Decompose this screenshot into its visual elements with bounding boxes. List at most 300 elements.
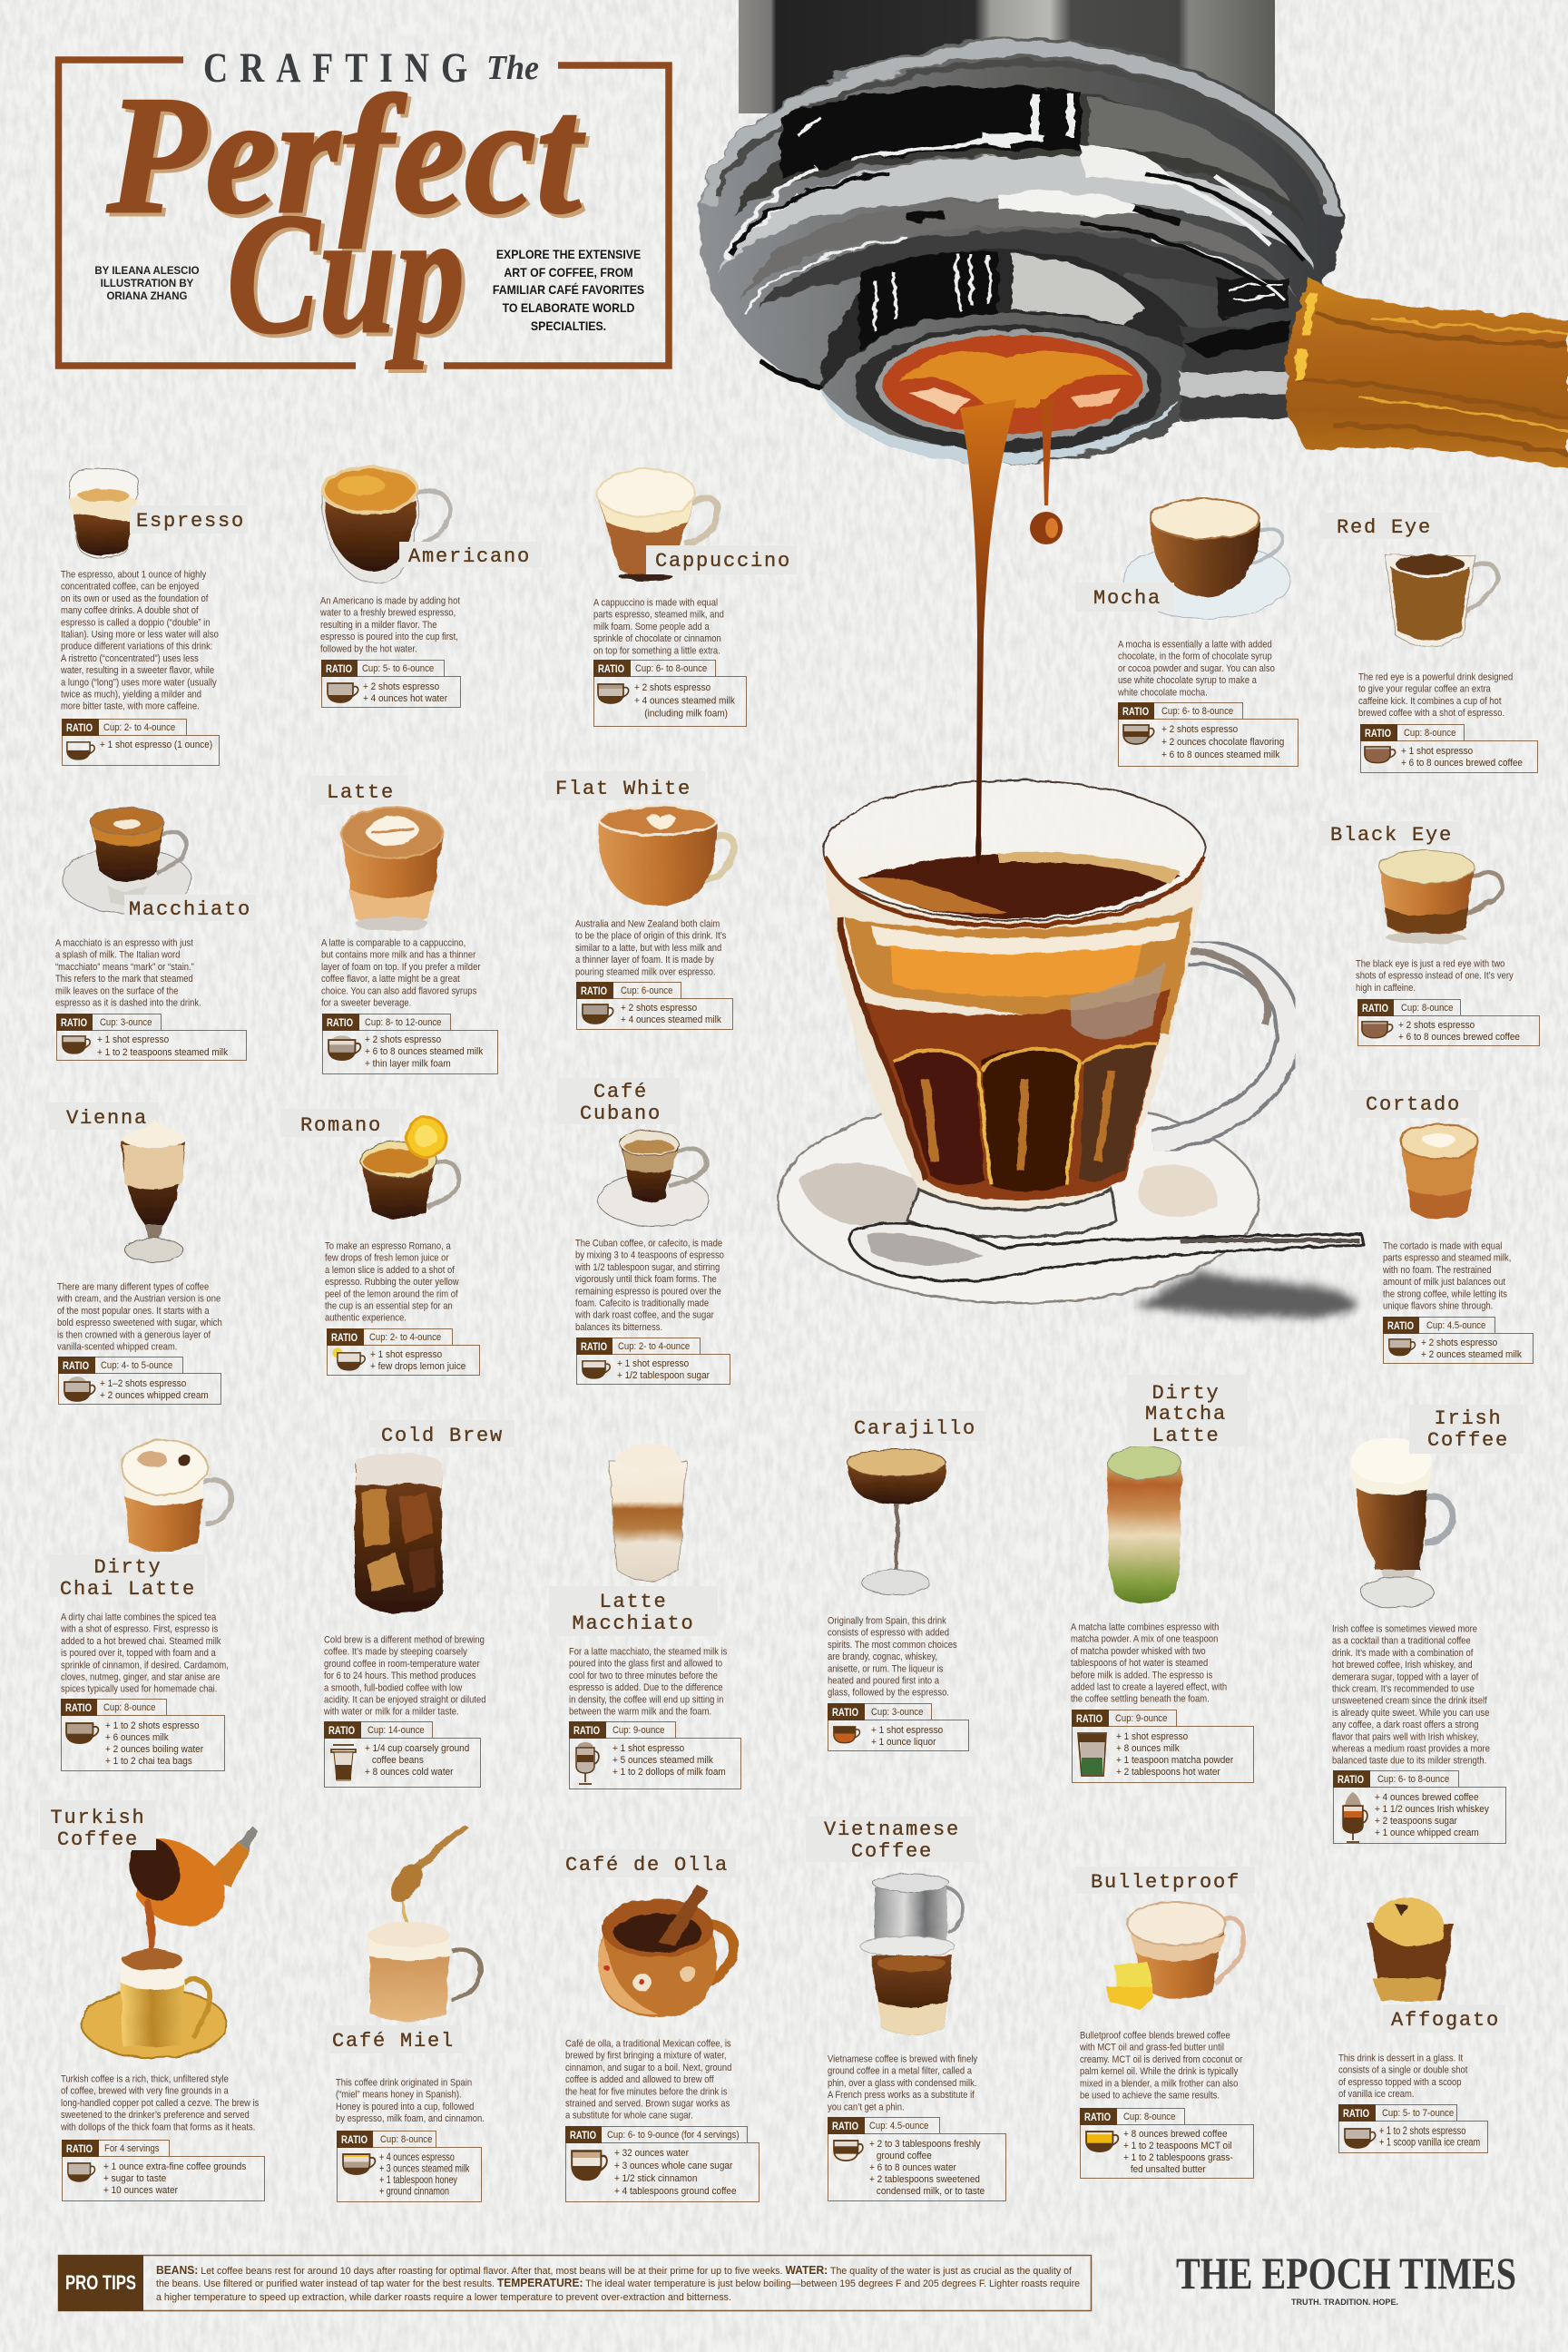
description: espresso. Rubbing the outer yellow	[325, 1278, 459, 1288]
ratio box: + 5 ounces steamed milk	[612, 1754, 713, 1766]
ratio box: + 1/4 cup coarsely ground	[365, 1742, 469, 1754]
ratio box: + 2 tablespoons hot water	[1116, 1766, 1220, 1778]
logo: the epoch times: TRUTH. TRADITION. HOPE.	[1291, 2298, 1398, 2307]
ratio box: RATIO	[581, 985, 607, 997]
illustration: matcha glass	[1107, 1446, 1181, 1604]
ratio box	[62, 719, 220, 766]
description: anisette, or rum. The liqueur is	[828, 1664, 943, 1675]
description: by mixing 3 to 4 teaspoons of espresso	[575, 1250, 724, 1261]
description: Vietnamese coffee is brewed with finely	[828, 2054, 978, 2065]
ratio box: + 6 ounces milk	[105, 1731, 169, 1743]
ratio box: Cup: 4.5-ounce	[1426, 1320, 1486, 1331]
description: with 1/2 tablespoon sugar, and stirring	[574, 1262, 720, 1273]
panel: cafe de olla	[559, 1849, 759, 2201]
description: foam. Cafecito is traditionally made	[575, 1298, 709, 1309]
description: amount of milk just balances out	[1383, 1278, 1505, 1288]
tips text: the beans. Use filtered or purified water instead of tap water for the best results. TEMPERATURE: The ideal water temperature is just below boiling—between 195 degrees F and 205 degrees F. Lighter roasts require	[156, 2277, 1080, 2289]
description: as a cocktail than a traditional coffee	[1332, 1636, 1471, 1647]
description: Turkish coffee is a rich, thick, unfiltered style	[61, 2074, 229, 2085]
description: be used to achieve the same results.	[1080, 2091, 1220, 2102]
description: tablespoons of hot water is steamed	[1071, 1659, 1209, 1669]
title label	[545, 771, 705, 800]
crema and basket	[883, 336, 1142, 434]
ratio box: + sugar to taste	[103, 2172, 166, 2184]
ratio box: + 2 shots espresso	[621, 1002, 697, 1014]
ratio box: RATIO	[1365, 727, 1391, 740]
ratio box: + 8 ounces milk	[1116, 1742, 1180, 1754]
ratio box: + 6 to 8 ounces steamed milk	[365, 1046, 484, 1057]
description: white chocolate mocha.	[1117, 688, 1208, 699]
title block: The	[486, 49, 539, 87]
title label: Macchiato	[572, 1612, 695, 1635]
ratio box: RATIO	[573, 1724, 600, 1737]
description: peel of the lemon around the rim of	[325, 1289, 458, 1300]
ratio box	[1333, 1770, 1506, 1844]
ratio box: + 1 shot espresso	[1116, 1730, 1188, 1742]
ratio box: + 3 ounces whole cane sugar	[614, 2160, 733, 2171]
icon: matcha glass	[1078, 1733, 1106, 1776]
description: A French press works as a substitute if	[828, 2091, 975, 2101]
ratio box: RATIO	[327, 1016, 353, 1029]
ratio box	[56, 1014, 247, 1060]
ratio box: + 1 to 2 chai tea bags	[105, 1755, 192, 1767]
description: This refers to the mark that steamed	[55, 975, 193, 985]
description: more bitter taste, with more caffeine.	[61, 701, 200, 712]
ratio box: + 3 ounces steamed milk	[379, 2164, 470, 2175]
illustration: black eye cup	[1379, 850, 1502, 944]
ratio box: RATIO	[326, 662, 352, 675]
ratio box: RATIO	[331, 1331, 358, 1344]
description: for 6 to 24 hours. This method produces	[324, 1671, 475, 1681]
ratio box: Cup: 3-ounce	[871, 1707, 924, 1718]
description: but contains more milk and has a thinner	[321, 950, 476, 961]
ratio box: + 2 shots espresso	[1398, 1019, 1475, 1031]
description: poured into the glass first and allowed to	[569, 1659, 722, 1670]
description: with dark roast coffee, and the sugar	[574, 1310, 714, 1321]
description: The espresso, about 1 ounce of highly	[61, 570, 207, 581]
panel: romano	[280, 1109, 479, 1376]
description: authentic experience.	[325, 1313, 407, 1324]
title label	[1127, 1375, 1248, 1447]
description: balances its bitterness.	[575, 1322, 662, 1333]
title label: Café	[593, 1081, 648, 1103]
title label	[557, 1078, 680, 1125]
ratio box: RATIO	[65, 1701, 92, 1714]
ratio box: + 1 to 2 dollops of milk foam	[612, 1766, 726, 1778]
description: the strong coffee, while letting its	[1383, 1289, 1507, 1300]
description: a smooth, full-bodied coffee with low	[324, 1683, 463, 1694]
illustration: romano glass with lemon	[360, 1117, 458, 1220]
title label: Dirty	[93, 1556, 162, 1579]
ratio box: + 2 ounces whipped cream	[100, 1389, 209, 1401]
description: a splash of milk. The Italian word	[55, 950, 181, 961]
panel: flat white	[545, 771, 733, 1029]
ratio box: + 1 shot espresso (1 ounce)	[100, 739, 212, 750]
ratio box: + 6 to 8 ounces water	[869, 2161, 956, 2173]
description: high in caffeine.	[1356, 983, 1416, 994]
description: A cappuccino is made with equal	[593, 598, 718, 609]
cup body and coffee	[824, 780, 1205, 1238]
panel: red eye	[1321, 513, 1537, 773]
byline: ORIANA ZHANG	[106, 291, 188, 302]
description: A macchiato is an espresso with just	[55, 938, 193, 949]
illustration: large glass coffee cup on saucer with spoon	[778, 780, 1364, 1318]
title label	[40, 1800, 156, 1851]
ratio box: ground coffee	[877, 2150, 932, 2161]
ratio box: + 1/2 stick cinnamon	[614, 2172, 697, 2184]
description: of matcha powder whisked with two	[1071, 1646, 1206, 1657]
ratio box: RATIO	[1076, 1712, 1102, 1725]
description: milk foam. Some people add a	[593, 622, 710, 632]
title label: Irish	[1434, 1407, 1503, 1430]
description: A mocha is essentially a latte with added	[1118, 640, 1272, 651]
description: The Cuban coffee, or cafecito, is made	[575, 1239, 722, 1250]
illustration: macchiato on saucer	[63, 808, 191, 913]
title label: Turkish	[50, 1807, 146, 1829]
panel: pro tips	[58, 2255, 1091, 2311]
ratio box: + 2 tablespoons sweetened	[869, 2173, 980, 2185]
description: added last to create a layered effect, with	[1071, 1682, 1227, 1693]
description: espresso as it is dashed into the drink.	[55, 998, 201, 1009]
description: An Americano is made by adding hot	[320, 596, 460, 607]
ratio box: + 2 shots espresso	[363, 681, 439, 692]
description: coffee. It’s made by steeping coarsely	[324, 1647, 468, 1658]
title label	[850, 1411, 985, 1441]
panel: cappuccino	[593, 469, 797, 726]
ratio box: + 4 ounces brewed coffee	[1375, 1791, 1479, 1803]
description: sprinkle of cinnamon, if desired. Cardamom,	[61, 1661, 229, 1671]
description: the coffee settling beneath the foam.	[1071, 1694, 1210, 1705]
description: cinnamon, and sugar to a boil. Next, ground	[565, 2063, 732, 2073]
ratio box: RATIO	[66, 721, 93, 734]
description: sprinkle of chocolate or cinnamon	[593, 634, 721, 644]
ratio box	[61, 1699, 225, 1771]
ratio box	[576, 982, 733, 1029]
ratio box: + 2 teaspoons sugar	[1375, 1815, 1457, 1827]
ratio box: RATIO	[1122, 705, 1149, 718]
ratio box: + 2 ounces steamed milk	[1421, 1348, 1522, 1360]
title label	[1350, 1090, 1478, 1118]
group head	[739, 0, 1275, 113]
illustration: irish coffee glass	[1350, 1438, 1453, 1608]
description: A matcha latte combines espresso with	[1071, 1622, 1220, 1633]
ratio box: RATIO	[1338, 1773, 1364, 1786]
tips text	[156, 2264, 1080, 2303]
ratio box: + thin layer milk foam	[365, 1058, 451, 1070]
description: with MCT oil and grass-fed butter until	[1079, 2043, 1224, 2053]
description: twice as much), yielding a milder and	[61, 690, 201, 701]
ratio box: Cup: 6- to 8-ounce	[1161, 706, 1233, 717]
description: or cocoa powder and sugar. You can also	[1118, 663, 1275, 674]
intro text: ART OF COFFEE, FROM	[504, 265, 633, 279]
title label	[49, 1554, 205, 1601]
ratio box	[565, 2126, 759, 2201]
description: to give your regular coffee an extra	[1358, 684, 1491, 695]
ratio box: Cup: 8-ounce	[103, 1702, 156, 1713]
ratio box: + 4 ounces hot water	[363, 692, 447, 704]
title label: Affogato	[1391, 2009, 1500, 2032]
saucer	[778, 1096, 1357, 1318]
ratio box: Cup: 8-ounce	[1123, 2112, 1176, 2122]
frame	[58, 60, 669, 366]
ratio box: Cup: 8- to 12-ounce	[365, 1017, 442, 1028]
ratio box: fed unsalted butter	[1131, 2163, 1206, 2175]
description: thick cream. It’s recommended to use	[1332, 1684, 1475, 1695]
description: resulting in a milder flavor. The	[320, 620, 437, 631]
panel: vienna	[49, 1102, 222, 1405]
ratio box: + 1 teaspoon matcha powder	[1116, 1754, 1234, 1766]
ratio box: + 2 shots espresso	[365, 1034, 441, 1045]
illustration: clay mug with cinnamon	[598, 1885, 733, 2017]
description: matcha powder. A mix of one teaspoon	[1071, 1634, 1219, 1645]
ratio box: + 4 ounces steamed milk	[621, 1014, 721, 1025]
title label: Mocha	[1093, 587, 1161, 610]
ratio box: + 1 shot espresso	[871, 1724, 943, 1736]
ratio box: Cup: 8-ounce	[1404, 728, 1456, 739]
ratio box: Cup: 4- to 5-ounce	[101, 1360, 172, 1371]
description: added to a hot brewed chai. Steamed milk	[61, 1636, 221, 1647]
ratio box	[593, 660, 746, 726]
panel: cafe miel	[330, 1824, 485, 2201]
description: Honey is poured into a cup, followed	[336, 2102, 475, 2112]
title label	[1076, 1867, 1255, 1894]
illustration: red eye glass cup	[1386, 554, 1497, 646]
ratio box: Cup: 5- to 6-ounce	[362, 663, 434, 674]
panel: bulletproof	[1076, 1867, 1255, 2178]
ratio box: Cup: 6- to 8-ounce	[1377, 1774, 1449, 1785]
title label: Cold Brew	[381, 1425, 504, 1447]
title label: Bulletproof	[1091, 1871, 1240, 1894]
panel: turkish coffee	[40, 1800, 265, 2201]
illustration: affogato glass with ice cream	[1367, 1898, 1454, 2001]
description: For a latte macchiato, the steamed milk is	[569, 1647, 727, 1658]
description: of espresso topped with a scoop	[1338, 2077, 1462, 2088]
panel: macchiato	[55, 808, 256, 1060]
illustration: honey dipper over mug	[368, 1824, 481, 2022]
title label: Café Miel	[332, 2030, 455, 2053]
ratio box: Cup: 3-ounce	[100, 1017, 152, 1028]
description: long-handled copper pot called a cezve. The brew is	[61, 2098, 259, 2109]
description: to be the place of origin of this drink. It’s	[575, 931, 726, 942]
description: balanced taste due to its milder strength.	[1332, 1756, 1486, 1767]
title label: Matcha	[1145, 1403, 1227, 1426]
cup handle	[1152, 951, 1289, 1142]
title label	[49, 1102, 159, 1130]
description: cloves, nutmeg, ginger, and star anise are	[61, 1672, 220, 1683]
pro tips badge	[58, 2255, 143, 2311]
description: espresso is added. Due to the difference	[569, 1683, 723, 1693]
ratio box: + 1 1/2 ounces Irish whiskey	[1375, 1803, 1489, 1815]
ratio box: RATIO	[832, 2120, 858, 2132]
ratio box: Cup: 4.5-ounce	[869, 2121, 929, 2132]
description: creamy. MCT oil is derived from coconut or	[1080, 2054, 1243, 2065]
description: “macchiato” means “mark” or “stain.”	[55, 962, 194, 973]
ratio box: Cup: 8-ounce	[380, 2134, 433, 2145]
panel: dirty matcha latte	[1071, 1375, 1254, 1782]
ratio box: + 1 to 2 teaspoons steamed milk	[97, 1046, 229, 1058]
ratio box: Cup: 2- to 4-ounce	[103, 722, 175, 733]
illustration: latte macchiato glass	[609, 1444, 687, 1581]
metal streaks	[726, 93, 1284, 331]
heading: perfect cup	[106, 62, 585, 369]
description: a lemon slice is added to a shot of	[325, 1265, 455, 1276]
tips text: BEANS: Let coffee beans rest for around 10 days after roasting for optimal flavor. After that, most beans will be at their prime for up to five weeks. WATER: The quality of the water is just as crucial as the quality of	[156, 2264, 1073, 2277]
panel: black eye	[1318, 821, 1539, 1045]
description: similar to a latte, but with less milk and	[575, 943, 722, 954]
description: with a shot of espresso. First, espresso is	[60, 1624, 218, 1635]
description: of vanilla ice cream.	[1338, 2090, 1415, 2100]
ratio box: Cup: 6- to 8-ounce	[635, 663, 707, 674]
description: is poured over it, topped with foam and a	[61, 1649, 216, 1659]
description: phin, over a glass with condensed milk.	[828, 2078, 976, 2089]
ratio box: Cup: 6-ounce	[621, 985, 673, 996]
ratio box: + 2 shots espresso	[1161, 723, 1238, 735]
description: Bulletproof coffee blends brewed coffee	[1080, 2031, 1230, 2042]
ratio box: RATIO	[328, 1724, 355, 1737]
ratio box: RATIO	[61, 1016, 87, 1029]
description: Irish coffee is sometimes viewed more	[1332, 1624, 1477, 1635]
description: on its own or used as the foundation of	[61, 593, 209, 604]
description: To make an espresso Romano, a	[325, 1241, 451, 1252]
panel: vietnamese coffee	[806, 1817, 1005, 2201]
ratio box: coffee beans	[372, 1754, 424, 1766]
illustration: espresso machine portafilter	[698, 0, 1568, 468]
title label: Coffee	[851, 1840, 933, 1863]
ratio box: (including milk foam)	[644, 708, 728, 720]
title label	[1075, 583, 1174, 612]
description: (“miel” means honey in Spanish).	[336, 2090, 462, 2101]
ratio box	[1072, 1710, 1254, 1782]
ratio box	[58, 1357, 221, 1405]
description: A dirty chai latte combines the spiced tea	[61, 1612, 217, 1623]
intro text: TO ELABORATE WORLD	[503, 300, 634, 315]
tips text: a higher temperature to speed up extraction, while darker roasts require a lower temperature to prevent over-extraction and bitterness.	[156, 2292, 731, 2303]
description: hot brewed coffee, Irish whiskey, and	[1332, 1661, 1473, 1671]
panel: latte macchiato	[549, 1444, 740, 1789]
illustration: cezve pouring into gold cup	[82, 1826, 258, 2058]
ratio box: + 1/2 tablespoon sugar	[617, 1369, 710, 1381]
description: Café de olla, a traditional Mexican coffee, is	[565, 2039, 731, 2050]
ratio box: RATIO	[1362, 1002, 1388, 1014]
illustration: chai mug	[122, 1440, 231, 1553]
description: The black eye is just a red eye with two	[1356, 959, 1505, 970]
description: A latte is comparable to a cappuccino,	[321, 938, 466, 949]
ratio box: RATIO	[598, 662, 624, 675]
description: brewed by first bringing a mixture of water,	[565, 2051, 727, 2062]
description: glass, followed by the espresso.	[828, 1688, 949, 1699]
ratio box	[322, 1014, 497, 1074]
description: of coffee, brewed with very fine grounds in a	[61, 2086, 229, 2097]
illustration: cappuccino cup	[597, 469, 719, 581]
description: by espresso, milk foam, and cinnamon.	[336, 2114, 485, 2124]
illustration: cubano cup on saucer	[598, 1131, 709, 1226]
description: few drops of fresh lemon juice or	[325, 1253, 449, 1264]
illustration: double wall glass	[322, 467, 450, 583]
description: vanilla-scented whipped cream.	[57, 1342, 177, 1353]
description: a lungo (“long”) uses more water (usually	[61, 678, 218, 689]
illustration: vienna glass with whipped cream	[122, 1121, 185, 1262]
ratio box: RATIO	[63, 1359, 89, 1372]
illustration: cortado glass	[1400, 1124, 1479, 1220]
title label: Red Eye	[1337, 516, 1432, 539]
intro text	[493, 247, 644, 333]
ratio box	[828, 2117, 1005, 2201]
title label: Espresso	[136, 510, 245, 533]
description: spirits. The most common choices	[828, 1640, 957, 1651]
panel: irish coffee	[1331, 1405, 1524, 1844]
description: demerara sugar, topped with a layer of	[1332, 1672, 1478, 1683]
ratio box: + ground cinnamon	[379, 2187, 449, 2198]
ratio box: Cup: 2- to 4-ounce	[369, 1332, 441, 1343]
description: with dollops of the thick foam that forms as it heats.	[60, 2122, 255, 2133]
description: coffee is added and allowed to brew off	[565, 2075, 714, 2085]
panel: latte	[310, 776, 497, 1074]
ratio box: Cup: 2- to 4-ounce	[618, 1341, 690, 1352]
description: a thinner layer of foam. It is made by	[575, 956, 715, 965]
description: The cortado is made with equal	[1383, 1241, 1502, 1252]
description: followed by the hot water.	[320, 644, 417, 655]
ratio box	[337, 2131, 481, 2201]
ratio box	[324, 1721, 481, 1788]
ratio box	[569, 1721, 740, 1789]
ratio box: RATIO	[832, 1706, 858, 1719]
ratio box	[828, 1703, 969, 1751]
illustration: latte glass	[341, 808, 444, 931]
title label: Macchiato	[129, 898, 251, 921]
ratio box: + 4 ounces espresso	[379, 2152, 455, 2163]
description: with no foam. The restrained	[1382, 1265, 1492, 1276]
coffee streams	[960, 399, 1063, 866]
description: vigorously until thick foam forms. The	[575, 1275, 717, 1285]
ratio box: Cup: 9-ounce	[612, 1725, 665, 1736]
icon: goblet	[1343, 1792, 1367, 1842]
ratio box: + 6 to 8 ounces steamed milk	[1161, 749, 1280, 760]
ratio box: Cup: 8-ounce	[1401, 1003, 1454, 1014]
title label	[1321, 513, 1442, 539]
description: The red eye is a powerful drink designed	[1358, 672, 1514, 683]
ratio box: Cup: 6- to 9-ounce (for 4 servings)	[607, 2130, 740, 2141]
ratio box: + 1 to 2 shots espresso	[1379, 2126, 1465, 2137]
illustration: carajillo coupe glass	[848, 1449, 946, 1595]
description: This coffee drink originated in Spain	[336, 2078, 472, 2089]
ratio box: + 32 ounces water	[614, 2147, 689, 2159]
intro text: EXPLORE THE EXTENSIVE	[496, 247, 641, 261]
heading: perfect cup: Perfect	[106, 62, 585, 249]
description: of the most popular ones. It starts with a	[57, 1306, 210, 1317]
description: choice. You can also add flavored syrups	[321, 986, 476, 997]
title label: Vietnamese	[824, 1818, 960, 1841]
ratio box: + 2 ounces boiling water	[105, 1743, 203, 1755]
description: spices typically used for homemade chai.	[61, 1684, 217, 1695]
panel: cortado	[1350, 1090, 1534, 1363]
description: with cream, and the Austrian version is one	[56, 1294, 220, 1305]
description: for a sweeter beverage.	[321, 998, 411, 1009]
description: strained and served. Brown sugar works as	[565, 2099, 730, 2110]
byline: ILLUSTRATION BY	[101, 279, 194, 289]
ratio box: + 2 shots espresso	[634, 681, 710, 693]
description: bold espresso sweetened with sugar, which	[57, 1318, 222, 1328]
description: palm kernel oil. While the drink is typically	[1080, 2067, 1239, 2077]
spoon	[850, 1223, 1364, 1281]
ratio box: + 2 ounces chocolate flavoring	[1161, 736, 1284, 748]
description: in density, the coffee will end up sitting in	[569, 1695, 724, 1706]
ratio box: + 1 to 2 teaspoons MCT oil	[1123, 2140, 1232, 2151]
description: parts espresso and steamed milk,	[1383, 1253, 1511, 1264]
description: the heat for five minutes before the drink is	[565, 2087, 728, 2098]
panel: americano	[319, 467, 542, 708]
description: Cold brew is a different method of brewing	[324, 1635, 485, 1646]
ratio box: + 1 scoop vanilla ice cream	[1379, 2138, 1480, 2149]
